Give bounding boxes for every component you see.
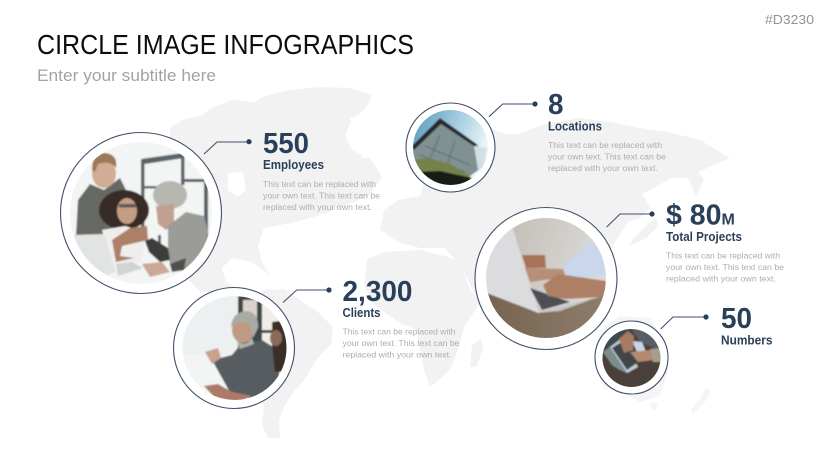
photo: laptop from above	[602, 329, 660, 387]
value: 50	[721, 303, 752, 335]
description: replaced with your own text.	[342, 350, 452, 360]
value: $ 80M	[666, 200, 735, 232]
connector	[489, 101, 538, 117]
description	[548, 140, 666, 173]
value: 8	[548, 89, 564, 121]
description	[666, 250, 784, 284]
description: your own text. This text can be	[666, 262, 784, 272]
description: This text can be replaced with	[342, 326, 456, 336]
heading: Locations	[548, 120, 602, 134]
description: This text can be replaced with	[263, 179, 376, 189]
heading: Numbers	[721, 334, 773, 348]
description: This text can be replaced with	[548, 140, 662, 150]
description: replaced with your own text.	[548, 163, 658, 173]
description: your own text. This text can be	[548, 152, 666, 162]
connector	[607, 211, 655, 227]
photo: man in meeting	[182, 296, 286, 400]
panel: numbers	[595, 303, 773, 394]
description: This text can be replaced with	[666, 250, 780, 260]
heading: Total Projects	[666, 230, 742, 244]
code label: #D3230	[765, 13, 814, 27]
panel: clients	[174, 276, 460, 408]
connector	[661, 314, 709, 329]
description: your own text. This text can be	[263, 190, 380, 200]
panel: total projects	[475, 200, 784, 350]
photo: office building	[413, 110, 488, 185]
heading: Employees	[263, 158, 324, 172]
description: your own text. This text can be	[342, 338, 460, 348]
description	[342, 326, 460, 360]
subtitle: Enter your subtitle here	[37, 66, 216, 85]
panel: locations	[406, 89, 666, 192]
panel: employees	[60, 128, 380, 295]
photo: team fist bump	[70, 142, 212, 284]
connector	[283, 287, 332, 302]
description: replaced with your own text.	[666, 274, 776, 284]
heading: Clients	[342, 306, 381, 320]
title: CIRCLE IMAGE INFOGRAPHICS	[37, 29, 414, 60]
photo: hands on laptop	[484, 216, 608, 340]
description	[263, 179, 380, 212]
value: 550	[263, 128, 309, 160]
connector	[204, 139, 252, 154]
description: replaced with your own text.	[263, 202, 372, 212]
world map background	[160, 87, 730, 438]
value: 2,300	[342, 276, 412, 308]
